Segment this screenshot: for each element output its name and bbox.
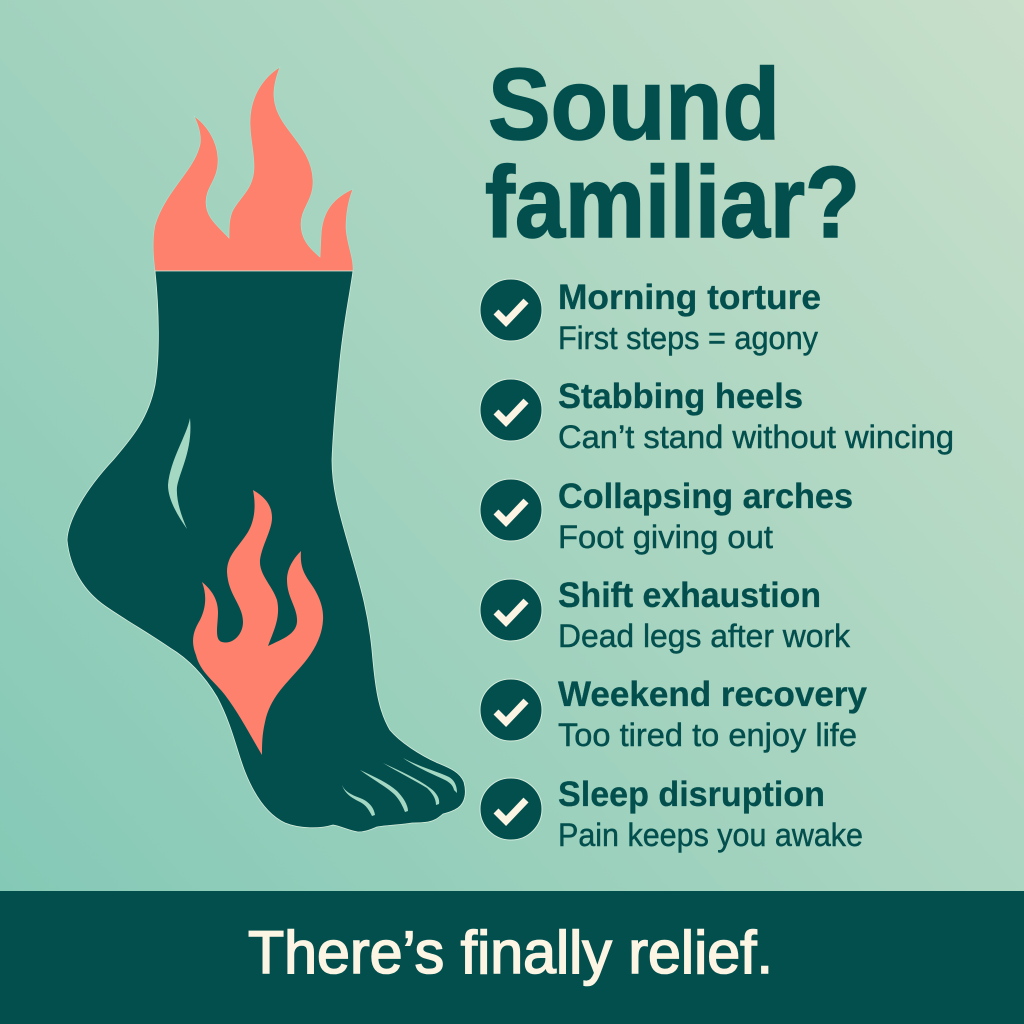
item: sleep disruption: Sleep disruption xyxy=(558,775,825,814)
item: sleep disruption: Pain keeps you awake xyxy=(558,817,863,853)
icon: flames above ankle xyxy=(153,67,353,271)
symptom list xyxy=(480,278,954,853)
footer banner xyxy=(0,891,1024,1024)
item: morning torture: First steps = agony xyxy=(558,320,818,356)
item: morning torture: Morning torture xyxy=(558,278,821,317)
item: collapsing arches xyxy=(480,477,853,555)
item: stabbing heels: Can’t stand without wincing xyxy=(558,419,954,455)
item: weekend recovery: Too tired to enjoy life xyxy=(558,717,857,753)
item: shift exhaustion: Dead legs after work xyxy=(558,618,851,654)
item: collapsing arches: Foot giving out xyxy=(558,519,773,555)
item: collapsing arches: Collapsing arches xyxy=(558,477,853,516)
item: weekend recovery: Weekend recovery xyxy=(558,675,868,714)
title xyxy=(485,49,860,259)
item: stabbing heels: Stabbing heels xyxy=(558,377,803,416)
item: weekend recovery xyxy=(480,675,868,753)
title: familiar? xyxy=(485,147,860,259)
banner text: There’s finally relief. xyxy=(248,919,773,986)
title: Sound xyxy=(488,49,780,161)
illustration: burning foot xyxy=(67,67,465,832)
item: shift exhaustion: Shift exhaustion xyxy=(558,576,821,615)
icon: flame on foot xyxy=(193,490,323,755)
item: sleep disruption xyxy=(480,775,863,853)
ankle crease xyxy=(168,418,190,529)
item: shift exhaustion xyxy=(480,576,851,654)
item: stabbing heels xyxy=(480,377,954,455)
item: morning torture xyxy=(480,278,821,356)
foot silhouette xyxy=(67,271,465,832)
toe lines xyxy=(342,758,457,816)
